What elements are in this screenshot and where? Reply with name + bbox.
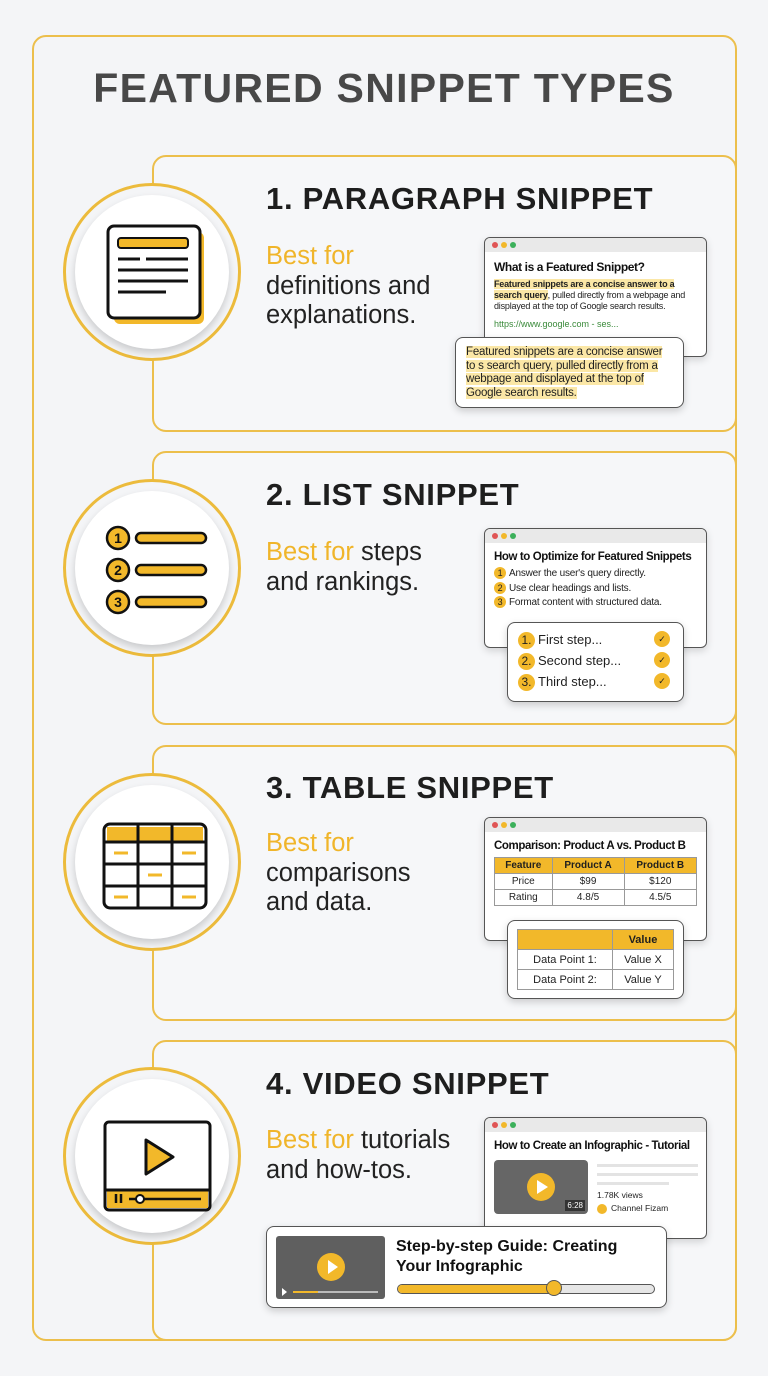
callout: video guide bbox=[266, 1226, 667, 1308]
callout: paragraph answer bbox=[455, 337, 684, 408]
browser: video: Channel Fizam bbox=[611, 1203, 668, 1213]
text: best for steps bbox=[266, 538, 422, 596]
browser: table: 4.8/5 bbox=[577, 892, 599, 903]
browser: paragraph: What is a Featured Snippet? bbox=[494, 260, 645, 274]
callout: list steps: 1. bbox=[521, 633, 532, 647]
heading 1: 1. PARAGRAPH SNIPPET bbox=[266, 181, 653, 216]
text: best for comparisons: and data. bbox=[266, 888, 372, 916]
callout: list steps: First step... bbox=[538, 632, 602, 647]
browser: video: 1.78K views bbox=[597, 1190, 643, 1200]
browser: video bbox=[484, 1117, 707, 1239]
text: best for tutorials bbox=[266, 1126, 450, 1184]
callout: table values: Value Y bbox=[624, 974, 662, 986]
callout: list steps: ✓ bbox=[658, 634, 666, 644]
panel: table snippet bbox=[152, 745, 737, 1021]
heading 4: 4. VIDEO SNIPPET bbox=[266, 1066, 549, 1101]
callout: table values: Data Point 1: bbox=[533, 954, 597, 966]
text: best for tutorials: Best for tutorials bbox=[266, 1126, 450, 1154]
icon: video player bbox=[63, 1067, 241, 1245]
callout: list steps bbox=[507, 622, 684, 702]
browser: table: $120 bbox=[649, 876, 671, 887]
text: best for definitions: definitions and bbox=[266, 272, 430, 300]
callout: table values: Value bbox=[629, 934, 657, 946]
browser: list bbox=[484, 528, 707, 648]
panel: list snippet bbox=[152, 451, 737, 725]
callout: list steps: ✓ bbox=[658, 655, 666, 665]
callout: table values bbox=[507, 920, 684, 999]
callout: table values: Value X bbox=[624, 954, 662, 966]
browser: table: Rating bbox=[509, 892, 538, 903]
callout: list steps: Second step... bbox=[538, 653, 621, 668]
browser: table bbox=[484, 817, 707, 941]
browser: paragraph bbox=[484, 237, 707, 357]
text: best for comparisons: Best for bbox=[266, 829, 354, 857]
title: FEATURED SNIPPET TYPES bbox=[93, 65, 675, 111]
icon: numbered list: 3 bbox=[114, 594, 122, 610]
browser: table: Comparison: Product A vs. Product B bbox=[494, 840, 686, 852]
browser: list: 1 bbox=[498, 568, 502, 578]
browser: list: Answer the user's query directly. bbox=[509, 568, 646, 579]
icon: numbered list bbox=[63, 479, 241, 657]
callout: list steps: ✓ bbox=[658, 676, 666, 686]
icon: paragraph document bbox=[63, 183, 241, 361]
callout: table values: Data Point 2: bbox=[533, 974, 597, 986]
browser: list: 2 bbox=[498, 582, 502, 592]
heading 3: 3. TABLE SNIPPET bbox=[266, 770, 554, 805]
panel: paragraph snippet bbox=[152, 155, 737, 432]
browser: table: Price bbox=[512, 876, 535, 887]
browser: table: $99 bbox=[580, 876, 596, 887]
callout: video guide: Your Infographic bbox=[396, 1258, 523, 1275]
text: best for steps: and rankings. bbox=[266, 568, 419, 596]
text: best for definitions: Best for bbox=[266, 242, 354, 270]
text: best for comparisons: comparisons bbox=[266, 858, 411, 886]
panel: video snippet bbox=[152, 1040, 737, 1341]
browser: list: 3 bbox=[498, 597, 502, 607]
callout: list steps: 2. bbox=[521, 654, 532, 668]
callout: video guide: Step-by-step Guide: Creating bbox=[396, 1238, 617, 1255]
browser: table: Product A bbox=[564, 860, 612, 871]
callout: list steps: Third step... bbox=[538, 674, 607, 689]
icon: numbered list: 2 bbox=[114, 562, 122, 578]
browser: table: Product B bbox=[636, 860, 684, 871]
text: best for definitions: explanations. bbox=[266, 301, 416, 329]
callout: list steps: 3. bbox=[521, 675, 532, 689]
browser: video: 6:28 bbox=[567, 1201, 583, 1210]
callout: paragraph answer: Featured snippets are a concise answer to s search query, pulled directly from a webpage and displayed at the top of Google search results. bbox=[466, 346, 662, 398]
text: best for steps: Best for steps bbox=[266, 538, 422, 566]
text: best for tutorials: and how-tos. bbox=[266, 1156, 412, 1184]
text: best for definitions bbox=[266, 242, 430, 329]
browser: table: 4.5/5 bbox=[649, 892, 671, 903]
browser: paragraph: Featured snippets are a concise answer to a search query, pulled directly from a webpage and displayed at the top of Google search results. bbox=[494, 279, 685, 311]
icon: table bbox=[63, 773, 241, 951]
browser: list: Use clear headings and lists. bbox=[509, 582, 631, 594]
browser: paragraph: https://www.google.com - ses... bbox=[494, 319, 619, 329]
browser: table: Feature bbox=[505, 860, 541, 871]
browser: video: How to Create an Infographic - Tutorial bbox=[494, 1140, 690, 1152]
icon: numbered list: 1 bbox=[114, 530, 122, 546]
heading 2: 2. LIST SNIPPET bbox=[266, 477, 519, 512]
browser: list: How to Optimize for Featured Snippets bbox=[494, 551, 691, 563]
text: best for comparisons bbox=[266, 829, 411, 916]
browser: list: Format content with structured data. bbox=[509, 597, 662, 608]
